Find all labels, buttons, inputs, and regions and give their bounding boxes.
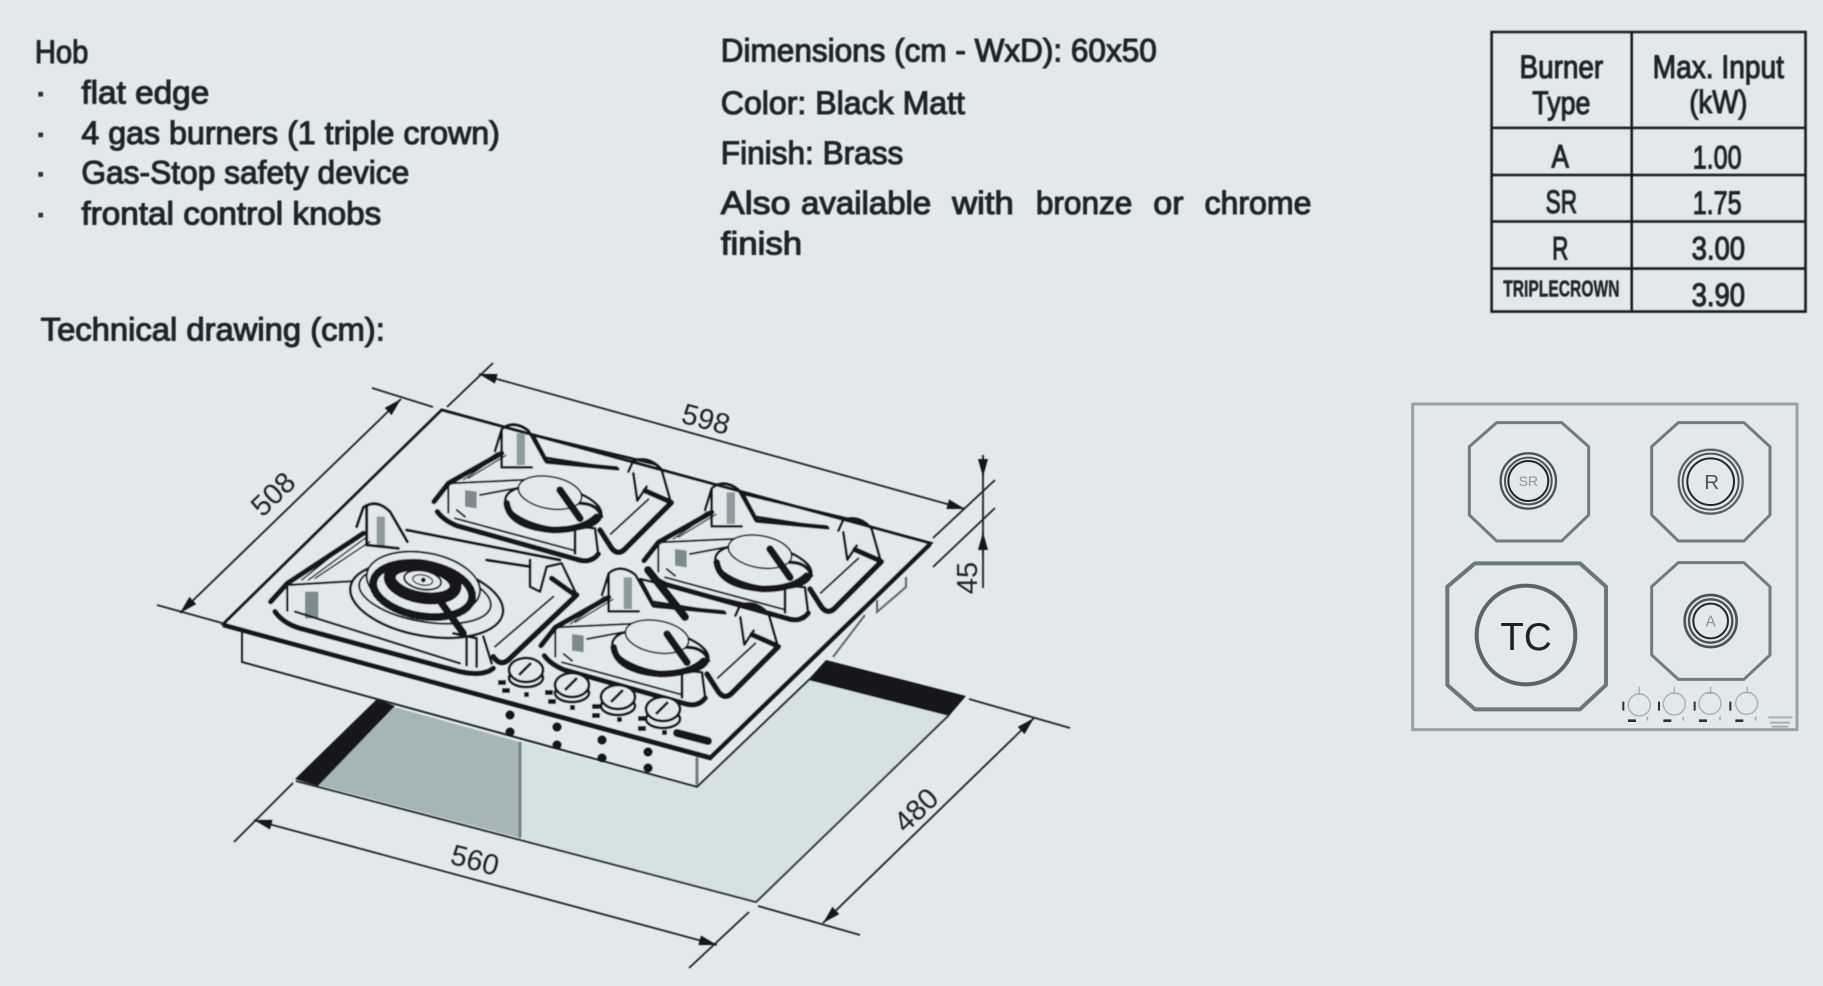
panel: specifications text: with — [951, 185, 1014, 221]
control knobs — [509, 658, 680, 728]
dimension: 508 — [157, 388, 433, 623]
table: burner type and max input: 3.90 — [1692, 277, 1745, 313]
plate outline — [1413, 404, 1797, 730]
burner R: R — [1704, 471, 1719, 494]
dimension: 598 — [447, 363, 995, 538]
panel: specifications text: finish — [721, 226, 802, 262]
dimension: 45 — [933, 455, 995, 594]
grate: back-right burner — [644, 484, 881, 620]
hob top plate — [223, 410, 931, 757]
dimension: 508: 508 — [245, 466, 302, 523]
feature list: flat edge — [81, 74, 209, 110]
table: burner type and max input: R — [1552, 230, 1568, 266]
control knobs — [1623, 687, 1758, 721]
panel: specifications text: Color: Black Matt — [721, 85, 965, 121]
heading: hob: Hob — [35, 34, 88, 70]
technical drawing: isometric hob and cut-out — [157, 363, 1070, 968]
table: burner type and max input: 1.00 — [1693, 140, 1742, 176]
dimension: 560: 560 — [447, 839, 502, 883]
panel: hob features — [35, 34, 500, 231]
dimension: 598: 598 — [678, 398, 733, 442]
table: burner type and max input: (kW) — [1689, 84, 1747, 120]
cut-out: light panel — [520, 680, 949, 902]
grate: back-left burner — [434, 425, 671, 561]
dimension: 45: 45 — [952, 562, 984, 594]
brand plate — [677, 733, 708, 741]
cut-out: shaded panel — [318, 707, 520, 838]
table: burner type and max input — [1492, 32, 1806, 313]
burner A — [1652, 563, 1770, 679]
plate front edge — [223, 544, 930, 758]
burner TC: TC — [1500, 616, 1552, 659]
burner pin: centre cross — [648, 570, 685, 617]
burner SR: SR — [1519, 473, 1538, 489]
cut-out outline — [296, 715, 949, 902]
dimension: 560 — [234, 783, 749, 968]
heading: technical drawing: Technical drawing (cm): — [41, 312, 385, 348]
triple crown burner and grate — [271, 504, 577, 674]
feature list: 4 gas burners (1 triple crown) — [81, 115, 500, 151]
panel: specifications text: Finish: Brass — [721, 135, 903, 171]
table: burner type and max input: Burner — [1520, 49, 1603, 85]
table: burner type and max input: Type — [1532, 85, 1590, 121]
dimension: 480: 480 — [888, 782, 945, 839]
burner SR — [1469, 423, 1589, 541]
panel: specifications text: Also — [721, 185, 791, 221]
plan view: burner layout — [1413, 404, 1797, 730]
burner TC — [1447, 563, 1606, 709]
cut-out: black edge bars — [295, 660, 966, 786]
feature list: Gas-Stop safety device — [81, 155, 409, 191]
panel: specifications text: Dimensions (cm - WxD): 60x50 — [721, 33, 1157, 69]
side bracket and rear skirt — [833, 577, 906, 657]
table: burner type and max input: Max. Input — [1653, 49, 1784, 85]
brand mark — [1768, 717, 1793, 727]
burner R — [1652, 423, 1770, 541]
table: burner type and max input: 1.75 — [1693, 185, 1742, 221]
knob markers and screw holes — [498, 680, 667, 772]
feature list — [38, 74, 500, 231]
hob body skirt — [242, 630, 812, 787]
table: burner type and max input: SR — [1546, 184, 1577, 220]
table: burner type and max input: A — [1551, 138, 1569, 174]
panel: specifications text: or — [1153, 185, 1184, 221]
panel: specifications text — [721, 33, 1311, 262]
panel: specifications text: available — [801, 185, 931, 221]
grate: front-right burner — [541, 569, 778, 705]
table: burner type and max input: TRIPLECROWN — [1503, 275, 1620, 301]
faint guide marks — [1197, 759, 1823, 985]
panel: specifications text: bronze — [1036, 185, 1132, 221]
panel: specifications text: chrome — [1204, 185, 1311, 221]
dimension: 480 — [758, 699, 1070, 935]
table: burner type and max input: 3.00 — [1692, 230, 1745, 266]
burner A: A — [1706, 614, 1717, 631]
feature list: frontal control knobs — [81, 195, 381, 231]
